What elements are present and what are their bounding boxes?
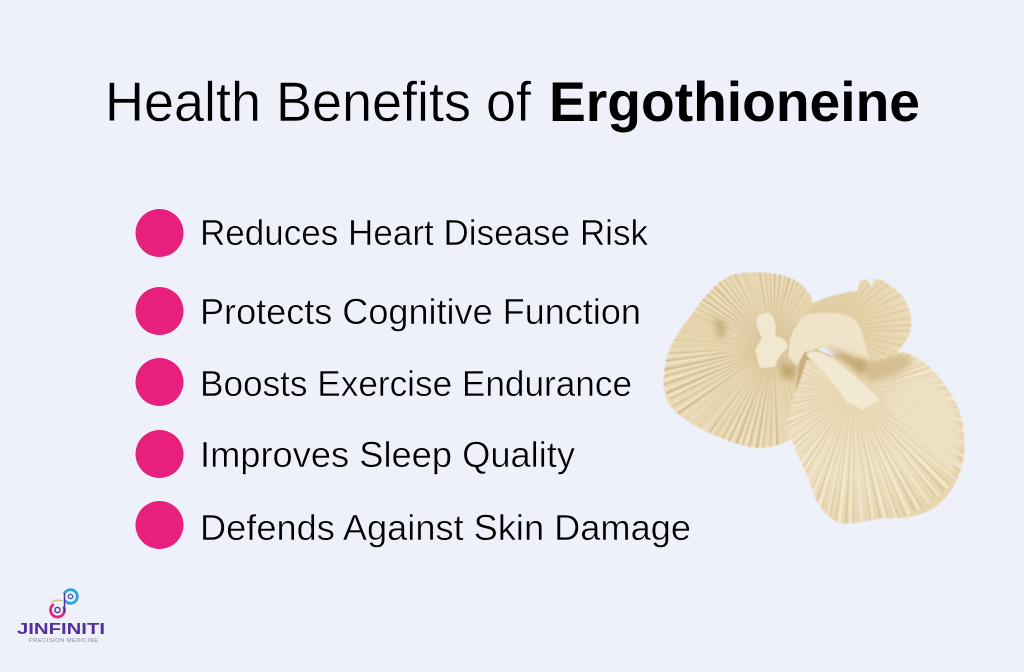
bottom right cap <box>786 352 965 524</box>
title: Ergothioneine <box>549 70 920 133</box>
stems <box>755 313 880 410</box>
benefit: heart disease: Reduces Heart Disease Risk <box>200 212 649 253</box>
logo tagline: PRECISION MEDICINE <box>29 638 98 644</box>
title: Health Benefits of <box>105 70 531 133</box>
logo icon <box>49 587 80 619</box>
benefit: skin damage: Defends Against Skin Damage <box>200 507 691 548</box>
benefit: exercise endurance: Boosts Exercise Endurance <box>200 363 632 404</box>
mushroom illustration <box>662 272 965 524</box>
top right cap <box>806 278 912 360</box>
center shadow backing <box>777 347 863 427</box>
left cap <box>662 272 814 448</box>
logo: Jinfiniti Precision Medicine <box>17 587 105 644</box>
benefit: cognitive function: Protects Cognitive Function <box>200 291 641 332</box>
title <box>105 70 920 133</box>
logo wordmark: JINFINITI <box>17 621 105 638</box>
benefit: sleep quality: Improves Sleep Quality <box>200 434 575 475</box>
benefits list <box>136 209 691 549</box>
